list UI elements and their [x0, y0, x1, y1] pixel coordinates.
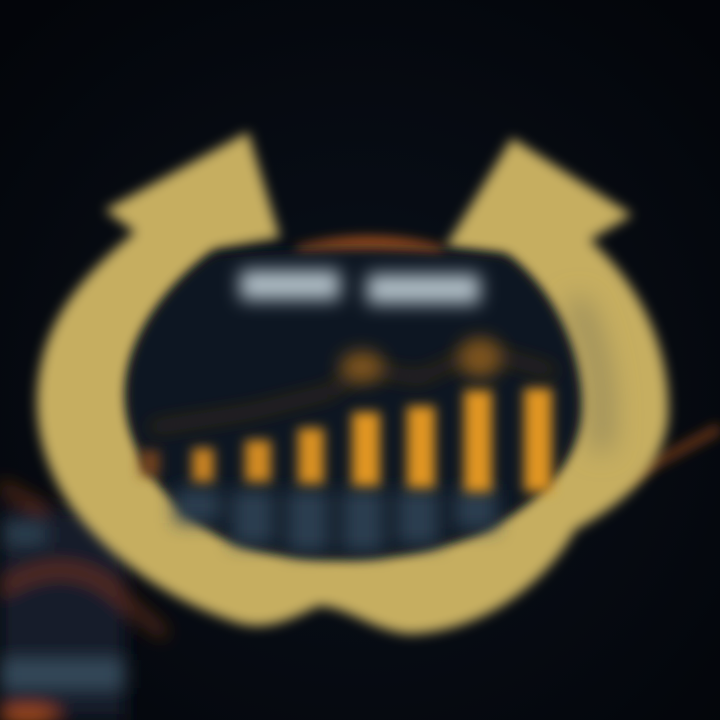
bar chart [140, 388, 552, 492]
trend line over bars [150, 350, 555, 428]
heading text blocks [240, 270, 480, 304]
ring shading right [575, 300, 602, 450]
lower left decorative grid [0, 485, 165, 720]
top orange arc [295, 237, 445, 262]
right trend line [620, 428, 720, 482]
heading left [240, 270, 340, 300]
bar chart base columns [175, 488, 497, 552]
trend markers [340, 338, 502, 383]
inner chart panel [128, 248, 579, 557]
golden circular arrows [37, 132, 668, 634]
heading right [367, 274, 480, 304]
